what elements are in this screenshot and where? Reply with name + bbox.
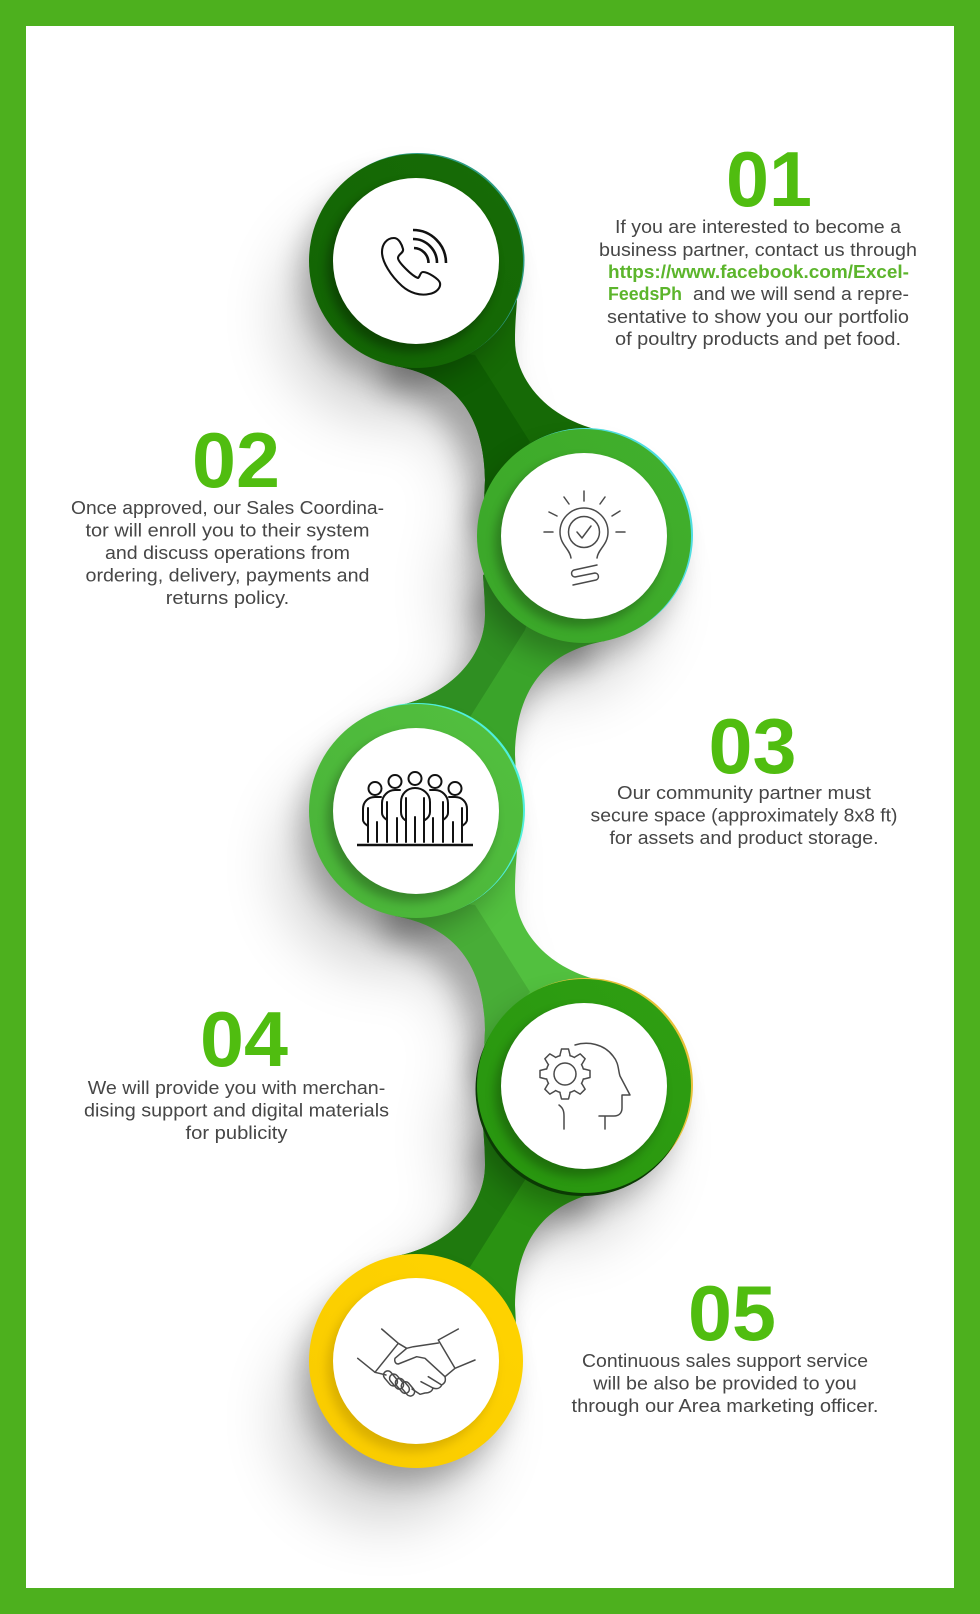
description 01: business partner, contact us through xyxy=(599,239,917,260)
description 05: through our Area marketing officer. xyxy=(572,1395,878,1416)
description 03: secure space (approximately 8x8 ft) xyxy=(590,804,898,826)
circle 1: phone xyxy=(302,153,524,382)
connector: step 3 to 4 xyxy=(395,850,592,1047)
description 03 xyxy=(590,782,898,848)
icon: gear in head xyxy=(540,1043,630,1129)
description 03: Our community partner must xyxy=(617,782,871,803)
description 02: tor will enroll you to their system xyxy=(86,520,370,540)
number 01: 01 xyxy=(726,135,812,223)
step 04 text xyxy=(84,995,389,1143)
step 01 text xyxy=(599,135,917,349)
circle 3: team xyxy=(302,703,525,932)
number 03: 03 xyxy=(708,702,796,790)
description 02: Once approved, our Sales Coordina- xyxy=(71,497,384,518)
icon: handshake xyxy=(358,1329,475,1398)
description 04: We will provide you with merchan- xyxy=(88,1077,385,1098)
number 04: 04 xyxy=(200,995,288,1083)
description 05 xyxy=(572,1350,878,1416)
circle 2: lightbulb xyxy=(470,428,693,657)
description 04: for publicity xyxy=(186,1122,288,1143)
description 01: FeedsPh xyxy=(608,283,682,304)
description 01 xyxy=(599,216,917,349)
description 01: https://www.facebook.com/Excel- xyxy=(608,261,909,282)
description 01: If you are interested to become a xyxy=(615,216,902,237)
icon: group of people xyxy=(357,772,473,845)
number 02: 02 xyxy=(192,416,280,504)
description 01: sentative to show you our portfolio xyxy=(607,306,909,327)
circle 4: gear and head xyxy=(470,978,693,1207)
step 02 text xyxy=(71,416,384,608)
description 01: of poultry products and pet food. xyxy=(615,328,901,349)
wide soft cast shadows of the timeline xyxy=(285,215,653,1518)
description 02: ordering, delivery, payments and xyxy=(86,564,370,586)
connector: step 2 to 3 xyxy=(405,574,605,767)
description 02 xyxy=(71,497,384,608)
description 03: for assets and product storage. xyxy=(610,827,878,848)
description 05: will be also be provided to you xyxy=(592,1372,857,1394)
description 01: and we will send a repre- xyxy=(693,283,909,304)
connector: step 4 to 5 xyxy=(397,1128,586,1323)
connector: step 1 to 2 xyxy=(395,300,593,498)
description 04: dising support and digital materials xyxy=(84,1100,389,1120)
number 05: 05 xyxy=(688,1269,776,1357)
description 04 xyxy=(84,1077,389,1143)
description 05: Continuous sales support service xyxy=(582,1350,868,1371)
icon: phone with signal xyxy=(382,230,446,295)
step 05 text xyxy=(572,1269,878,1416)
step 03 text xyxy=(590,702,898,848)
near shadows under the connectors xyxy=(381,284,591,1379)
icon: lightbulb with check xyxy=(544,491,625,585)
description 02: returns policy. xyxy=(166,587,289,608)
description 02: and discuss operations from xyxy=(105,542,350,563)
circle 5: handshake xyxy=(302,1254,523,1482)
